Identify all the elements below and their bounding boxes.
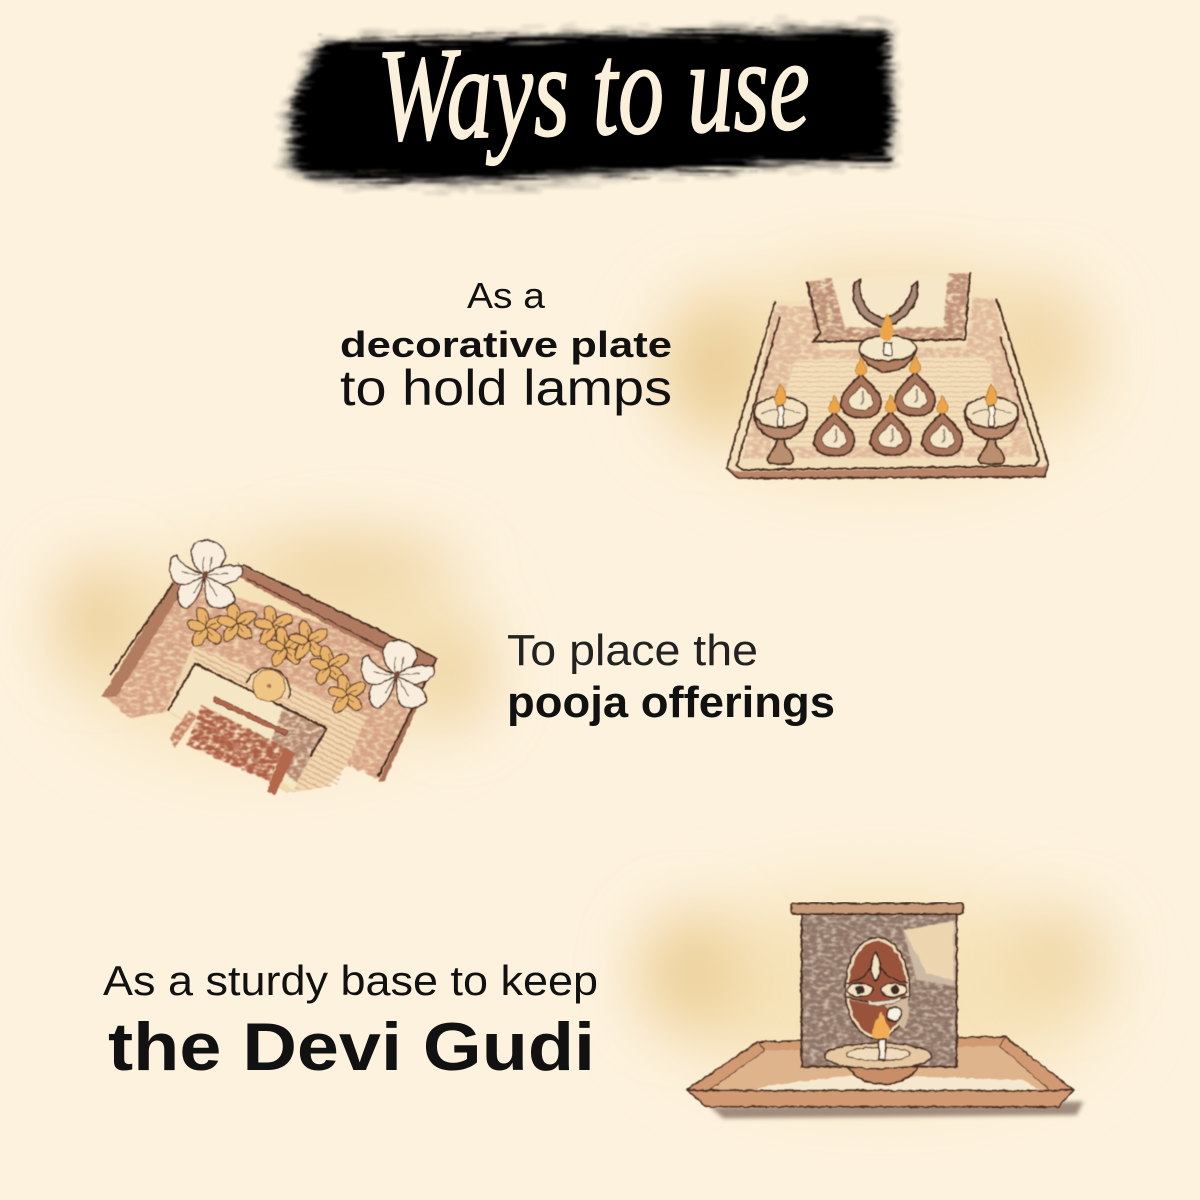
- chalice lamp right: [965, 384, 1018, 464]
- illustration: tray with flowers: [55, 535, 485, 795]
- teardrop lamp: [895, 356, 935, 416]
- chalice lamp left: [754, 384, 807, 464]
- round knob: [247, 668, 290, 702]
- frayed edge of brush stroke: [288, 28, 894, 183]
- section 3 text: Devi Gudi: [103, 957, 598, 1085]
- shrine box: [802, 913, 957, 1067]
- tray: [687, 1037, 1073, 1107]
- back inset frame: [807, 273, 970, 342]
- garland of orange flowers: [186, 602, 368, 715]
- white flower right: [361, 641, 435, 708]
- tray surface: [105, 578, 437, 793]
- text line: As a: As a: [467, 275, 546, 316]
- teardrop lamp: [814, 396, 854, 456]
- watercolor blotch behind flowers: [55, 535, 485, 755]
- text line: decorative plate: decorative plate: [340, 324, 672, 365]
- title: Ways to use: Ways to use: [376, 10, 812, 169]
- watercolor blotch behind lamps: [665, 265, 1095, 475]
- text line: To place the: To place the: [507, 626, 758, 675]
- lamp in front of shrine: [825, 1039, 932, 1084]
- text line: to hold lamps: to hold lamps: [340, 360, 672, 416]
- white flower left: [170, 541, 243, 608]
- shrine lid: [791, 903, 963, 914]
- section 2 text: pooja offerings: [507, 626, 835, 727]
- teardrop lamp: [871, 395, 911, 455]
- black brush stroke: [294, 32, 890, 179]
- teardrop lamp: [841, 358, 881, 418]
- top lamp: [859, 313, 916, 372]
- tray shadow: [710, 1102, 1083, 1118]
- Devi face: [845, 938, 909, 1039]
- watercolor blotch behind Devi Gudi: [640, 890, 1105, 1090]
- brown block: [170, 697, 295, 795]
- text line: the Devi Gudi: the Devi Gudi: [108, 1009, 595, 1085]
- title banner: [288, 10, 894, 183]
- tray: [727, 297, 1048, 478]
- text line: pooja offerings: pooja offerings: [507, 678, 835, 727]
- central recess: [168, 663, 327, 790]
- hanging lamp chain: [853, 280, 918, 327]
- illustration: tray with lamps: [665, 265, 1095, 478]
- illustration: Devi Gudi on tray: [640, 890, 1105, 1118]
- teardrop lamp: [922, 396, 962, 456]
- text line: As a sturdy base to keep: As a sturdy base to keep: [103, 957, 598, 1004]
- tray rim: [102, 563, 437, 782]
- section 1 text: decorative plate: [340, 275, 672, 416]
